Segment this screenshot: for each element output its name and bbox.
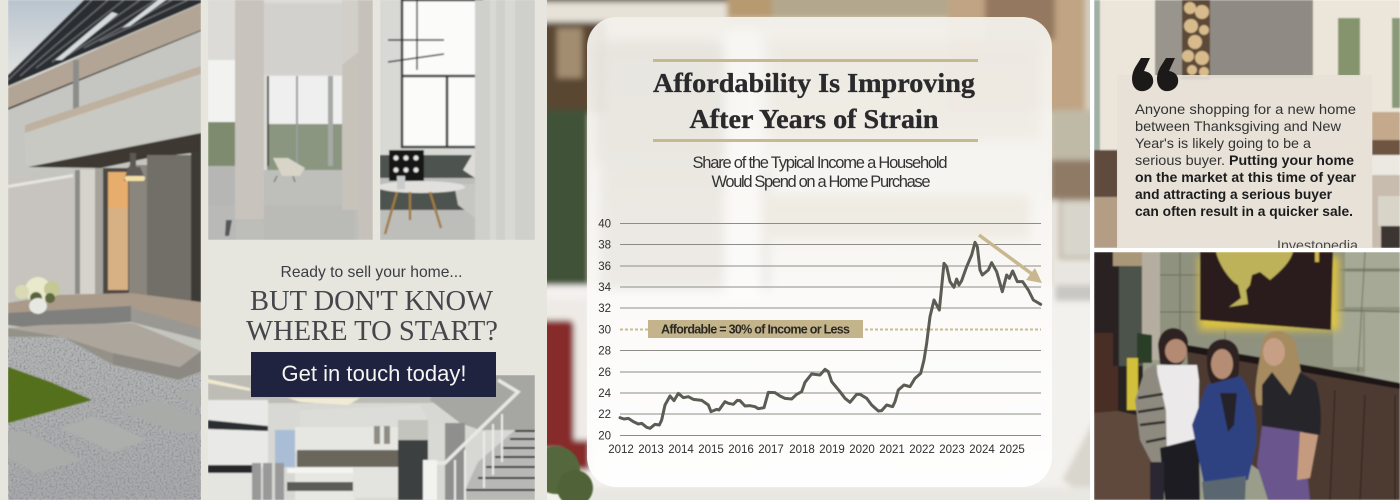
x axis labels: 2025: [999, 444, 1025, 456]
x axis labels: 2021: [879, 444, 905, 456]
title: After Years of Strain: [690, 104, 938, 134]
quote text: can often result in a quicker sale.: [1135, 203, 1353, 219]
y axis labels: 40: [598, 218, 611, 230]
x axis labels: 2020: [849, 444, 875, 456]
x axis labels: 2023: [939, 444, 965, 456]
x axis labels: 2013: [638, 444, 664, 456]
y axis labels: 32: [598, 303, 611, 315]
photo: living room with sofa and curtain: [377, 0, 535, 240]
blurred tones showing through card: [595, 30, 1040, 300]
quote text: and attracting a serious buyer: [1135, 186, 1333, 202]
attribution: Investopedia: [1277, 237, 1358, 253]
y axis labels: 30: [598, 324, 611, 336]
panel background: blurred living room photo: [530, 0, 1110, 500]
data line: [620, 242, 1041, 428]
x axis labels: 2012: [608, 444, 634, 456]
text: ready to sell: Ready to sell your home...: [280, 264, 462, 281]
x axis labels: [608, 444, 1025, 456]
threshold label: [648, 320, 863, 338]
photo: white kitchen with staircase: [208, 375, 535, 500]
quote text: Putting your home: [1229, 152, 1354, 168]
arrow: downward trend: [979, 235, 1042, 283]
subtitle: Would Spend on a Home Purchase: [712, 173, 930, 191]
y axis labels: 20: [598, 430, 611, 442]
quote text: on the market at this time of year: [1135, 169, 1357, 185]
y axis labels: 26: [598, 367, 611, 379]
person: woman right: [1255, 331, 1321, 500]
y axis labels: 24: [598, 388, 612, 400]
page background: [0, 0, 547, 500]
photo: modern house exterior: [8, 0, 201, 500]
x axis labels: 2016: [728, 444, 754, 456]
photo: interior hallway with window: [208, 0, 373, 240]
y axis labels: 38: [598, 240, 611, 252]
photo: three women at restaurant: [1094, 252, 1400, 500]
button: get in touch: [251, 352, 496, 397]
person: woman centre: [1192, 339, 1256, 500]
x axis labels: 2014: [668, 444, 694, 456]
quote text: serious buyer.: [1135, 152, 1225, 168]
line chart: [598, 218, 1042, 456]
x axis labels: 2022: [909, 444, 935, 456]
y axis labels: 22: [598, 409, 611, 421]
heading: but don't know where to start: [246, 285, 498, 347]
button: get in touch: Get in touch today!: [282, 361, 466, 386]
quote text: Anyone shopping for a new home: [1135, 101, 1356, 117]
quote panel: [1117, 58, 1372, 253]
y axis labels: 34: [598, 282, 612, 294]
y axis labels: 36: [598, 261, 611, 273]
threshold label: Affordable = 30% of Income or Less: [661, 322, 850, 336]
person: woman left: [1135, 328, 1200, 500]
x axis labels: 2017: [758, 444, 784, 456]
heading: but don't know where to start: WHERE TO START?: [246, 315, 498, 347]
quote text: [1135, 101, 1357, 219]
heading: but don't know where to start: BUT DON'T KNOW: [250, 285, 494, 317]
30 percent threshold line: [620, 328, 1041, 330]
title: Affordability Is Improving: [653, 68, 976, 98]
quote text: between Thanksgiving and New: [1135, 118, 1342, 134]
x axis labels: 2015: [698, 444, 724, 456]
x axis labels: 2018: [789, 444, 815, 456]
y axis labels: 28: [598, 346, 611, 358]
subtitle: [692, 154, 948, 191]
x axis labels: 2024: [969, 444, 995, 456]
quote text: Year's is likely going to be a: [1135, 135, 1311, 151]
y axis labels: [598, 218, 612, 442]
x axis labels: 2019: [819, 444, 845, 456]
y axis grid: [620, 224, 1041, 436]
panel: chart card: [587, 17, 1052, 487]
subtitle: Share of the Typical Income a Household: [692, 154, 948, 172]
icon: quotation marks: [1132, 58, 1178, 91]
title: [653, 59, 978, 142]
photo: bright living room with log wall: [1094, 0, 1400, 248]
